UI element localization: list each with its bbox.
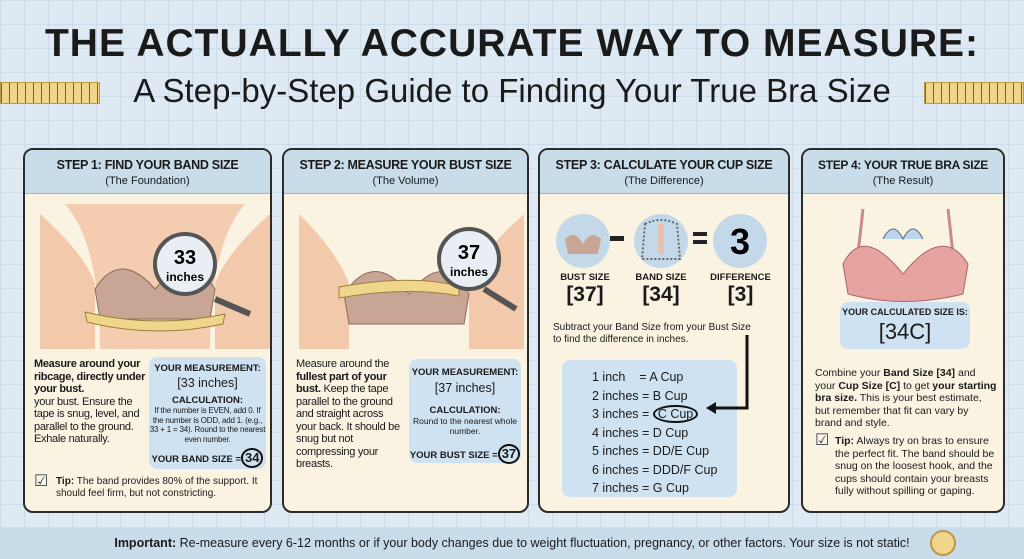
instruction text: Subtract your Band Size from your Bust Size to find the difference in inches.: [553, 322, 751, 345]
panel: step 4: [801, 148, 1005, 513]
measurement box: Round to the nearest whole number.: [413, 416, 517, 436]
measurement box: YOUR MEASUREMENT:: [154, 363, 261, 374]
instruction text: Measure around your ribcage, directly under your bust.: [34, 358, 145, 395]
arrow: [706, 335, 748, 414]
tip: ☑: [34, 473, 48, 490]
cup chart box: 3 inches = C Cup: [592, 407, 693, 421]
header step 3: STEP 3: CALCULATE YOUR CUP SIZE: [556, 158, 772, 172]
measurement box: YOUR BAND SIZE =: [152, 454, 241, 465]
illustration: bra: [842, 208, 968, 302]
panel: step 3: [538, 148, 790, 513]
instruction text: [34, 358, 146, 445]
panel: step 3: DIFFERENCE: [710, 272, 771, 283]
header step 1: (The Foundation): [105, 175, 190, 187]
equation icons: [556, 214, 767, 268]
instruction text: your bust. Ensure the tape is snug, level, and parallel to the ground. Exhale naturally.: [34, 396, 139, 445]
header step 3: (The Difference): [624, 175, 704, 187]
footer note: [0, 527, 1024, 559]
result box: [34C]: [879, 319, 931, 344]
icon: tape measure left: [0, 82, 100, 104]
header step 2: (The Volume): [372, 175, 439, 187]
panel: step 3: [34]: [642, 283, 680, 306]
cup chart box: 2 inches = B Cup: [592, 388, 688, 402]
header step 2: STEP 2: MEASURE YOUR BUST SIZE: [299, 158, 512, 172]
icon: tape measure right: [924, 82, 1024, 104]
result box: YOUR CALCULATED SIZE IS:: [842, 307, 968, 317]
panel: step 3: [3]: [728, 283, 753, 306]
tip: ☑: [815, 432, 829, 449]
illustration: torso with tape at bust: [299, 214, 524, 349]
measurement box: [37 inches]: [435, 381, 495, 395]
cup chart box: 1 inch = A Cup: [592, 370, 683, 384]
icon: tape roll: [930, 530, 956, 556]
header step 4: [803, 150, 1003, 194]
illustration: torso with tape: [40, 204, 270, 349]
cup chart box: 5 inches = DD/E Cup: [592, 444, 709, 458]
header step 1: [25, 150, 270, 194]
tip: Tip: The band provides 80% of the support. It should feel firm, but not constricting.: [56, 476, 257, 499]
illustration: torso with tape: inches: [166, 270, 204, 284]
measurement box: [33 inches]: [177, 376, 238, 390]
measurement box: 37: [502, 446, 516, 461]
result box: [840, 302, 970, 349]
header step 2: [284, 150, 527, 194]
instruction text: Measure around the fullest part of your bust. Keep the tape parallel to the ground and straight across your back. It should be snug but not compressing your breasts.: [296, 358, 400, 470]
illustration: torso with tape: 33: [174, 247, 196, 269]
labels: [560, 272, 610, 306]
cup chart box: 6 inches = DDD/F Cup: [592, 462, 717, 476]
measurement box: CALCULATION:: [172, 395, 243, 406]
cup chart box: 4 inches = D Cup: [592, 426, 688, 440]
panel: step 1: [23, 148, 272, 513]
measurement box: [409, 359, 521, 463]
measurement box: [149, 357, 266, 469]
measurement box: CALCULATION:: [429, 405, 501, 416]
equation icons: 3: [730, 221, 750, 262]
measurement box: YOUR MEASUREMENT:: [412, 367, 518, 378]
measurement box: YOUR BUST SIZE =: [410, 450, 498, 461]
tip: Tip: Always try on bras to ensure the perfect fit. The band should be snug on the loosest hook, and the cups should contain your breasts fully without spilling or gaping.: [835, 435, 994, 497]
panel: step 3: BAND SIZE: [635, 272, 687, 283]
measurement box: If the number is EVEN, add 0. If the number is ODD, add 1. (e.g., 33 + 1 = 34). Round to the nearest even number.: [150, 406, 265, 444]
combine text: Combine your Band Size [34] and your Cup Size [C] to get your starting bra size. This is your best estimate, but remember that fit can vary by brand and style.: [815, 367, 996, 429]
header step 1: STEP 1: FIND YOUR BAND SIZE: [57, 158, 238, 172]
cup chart box: 7 inches = G Cup: [592, 481, 689, 495]
panel: step 2: [282, 148, 529, 513]
header step 3: [540, 150, 788, 194]
footer note: Important: Re-measure every 6-12 months or if your body changes due to weight fluctuation, pregnancy, or other factors. Your size is not static!: [114, 536, 910, 550]
title: THE ACTUALLY ACCURATE WAY TO MEASURE:: [45, 22, 979, 65]
illustration: torso with tape at bust: 37: [458, 242, 480, 264]
illustration: torso with tape at bust: inches: [450, 265, 488, 279]
labels: BUST SIZE: [560, 272, 610, 283]
header step 4: STEP 4: YOUR TRUE BRA SIZE: [818, 158, 988, 172]
cup chart box: [562, 360, 737, 497]
measurement box: 34: [245, 450, 259, 465]
header step 4: (The Result): [873, 175, 933, 187]
subtitle: A Step-by-Step Guide to Finding Your True Bra Size: [133, 72, 891, 109]
labels: [37]: [566, 283, 604, 306]
